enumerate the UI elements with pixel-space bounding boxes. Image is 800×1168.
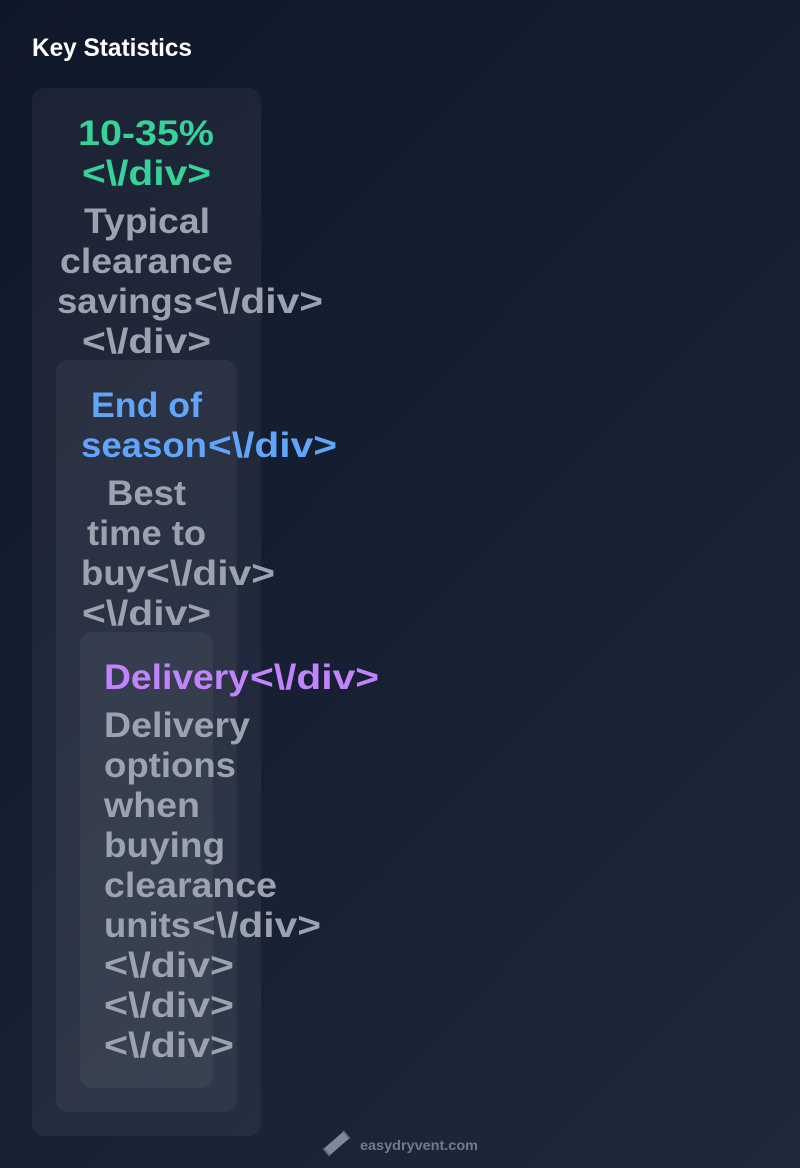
footer brand (323, 1131, 478, 1156)
statistic value: 10-35%: <\/div> (82, 154, 211, 193)
brand name: easydryvent.com (360, 1137, 478, 1153)
statistic value: delivery: Delivery (104, 658, 250, 697)
statistic label: delivery options: <\/div> (104, 986, 234, 1025)
statistic label: typical clearance savings: savings (57, 282, 193, 321)
statistic label: delivery options: Delivery (104, 706, 251, 745)
statistic label: typical clearance savings: <\/div> (194, 282, 323, 321)
panel: clearance savings statistic (32, 88, 379, 1136)
statistic value: end of season: season (81, 426, 207, 465)
statistic label: best time to buy (81, 474, 275, 633)
statistic label: delivery options: clearance (104, 866, 277, 905)
panel: best time to buy statistic (56, 360, 379, 1112)
statistic label: delivery options: buying (104, 826, 225, 865)
statistic label: best time to buy: <\/div> (82, 594, 211, 633)
statistic label: delivery options: options (104, 746, 236, 785)
icon: vent duct (323, 1131, 350, 1156)
statistic label: best time to buy: <\/div> (146, 554, 275, 593)
statistic value: end of season (81, 386, 337, 465)
statistic label: typical clearance savings: Typical (84, 202, 210, 241)
statistic label: best time to buy: Best (107, 474, 186, 513)
statistic label: delivery options: <\/div> (104, 946, 234, 985)
statistic value: delivery (104, 658, 379, 697)
statistic label: typical clearance savings: <\/div> (82, 322, 211, 361)
title: Key Statistics (32, 34, 192, 62)
statistic value: end of season: <\/div> (208, 426, 337, 465)
statistic label: delivery options: when (103, 786, 200, 825)
statistic label: best time to buy: time to (87, 514, 206, 553)
statistic label: delivery options: <\/div> (192, 906, 321, 945)
statistic value: 10-35%: 10-35% (78, 114, 214, 153)
statistic value: 10-35% (78, 114, 214, 193)
statistic label: typical clearance savings (57, 202, 323, 361)
panel: delivery statistic (80, 632, 379, 1088)
statistic label: best time to buy: buy (81, 554, 147, 593)
statistic value: end of season: End of (91, 386, 202, 425)
statistic label: typical clearance savings: clearance (60, 242, 233, 281)
statistic label: delivery options (103, 706, 321, 1065)
statistic value: delivery: <\/div> (250, 658, 379, 697)
statistic label: delivery options: <\/div> (104, 1026, 234, 1065)
statistic label: delivery options: units (104, 906, 191, 945)
